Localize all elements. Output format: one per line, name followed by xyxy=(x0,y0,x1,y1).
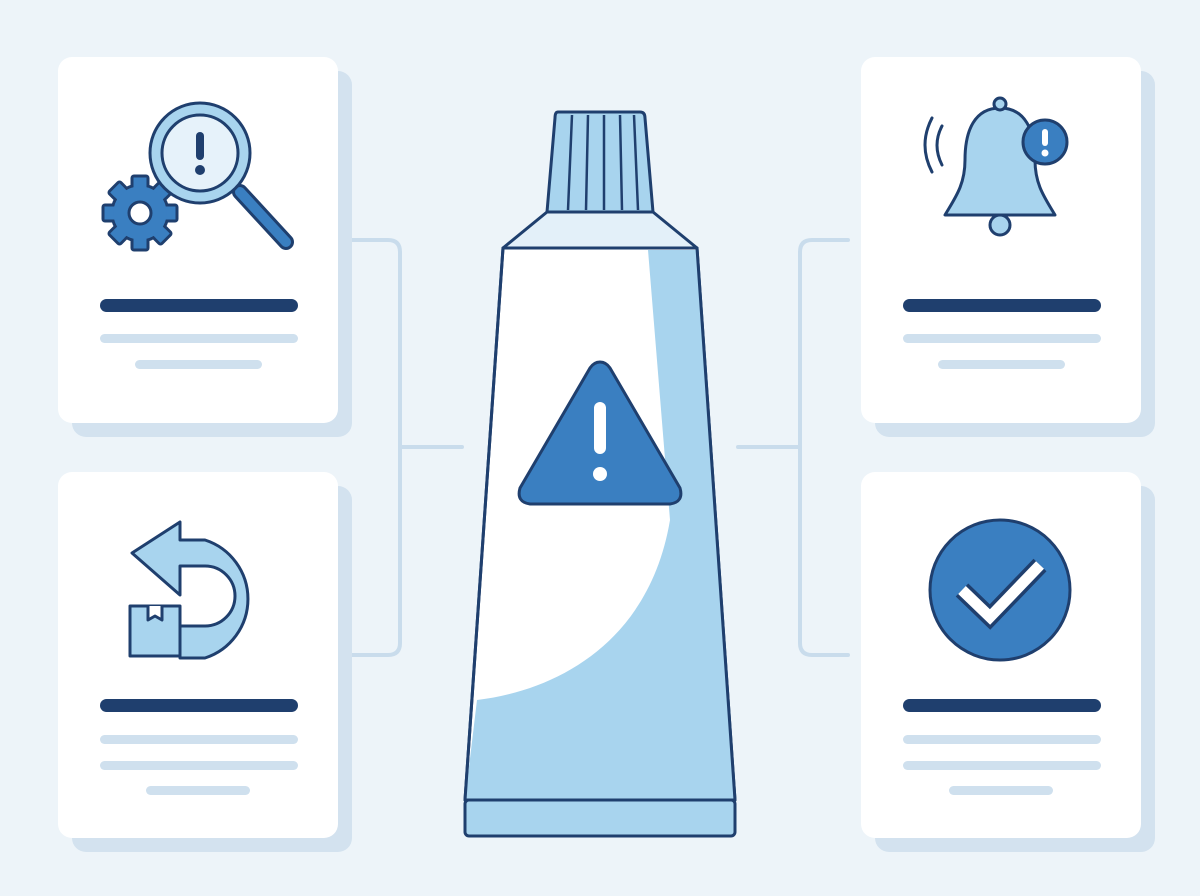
card: bottom right xyxy=(861,472,1155,852)
icon: bell with alert xyxy=(925,98,1067,235)
connector: left xyxy=(352,240,462,655)
tube xyxy=(465,112,735,836)
card: bottom left xyxy=(58,472,352,852)
icon: gear and magnifier xyxy=(103,103,286,250)
tube bottom band xyxy=(465,800,735,836)
card: top left xyxy=(58,57,352,437)
icon: return arrow with box xyxy=(130,522,248,658)
tube cap xyxy=(547,112,653,212)
icon: check circle xyxy=(930,520,1070,660)
tube body xyxy=(465,248,735,800)
icon: warning triangle xyxy=(519,362,681,504)
connector: right xyxy=(738,240,848,655)
tube shoulder xyxy=(503,212,697,248)
card: top right xyxy=(861,57,1155,437)
